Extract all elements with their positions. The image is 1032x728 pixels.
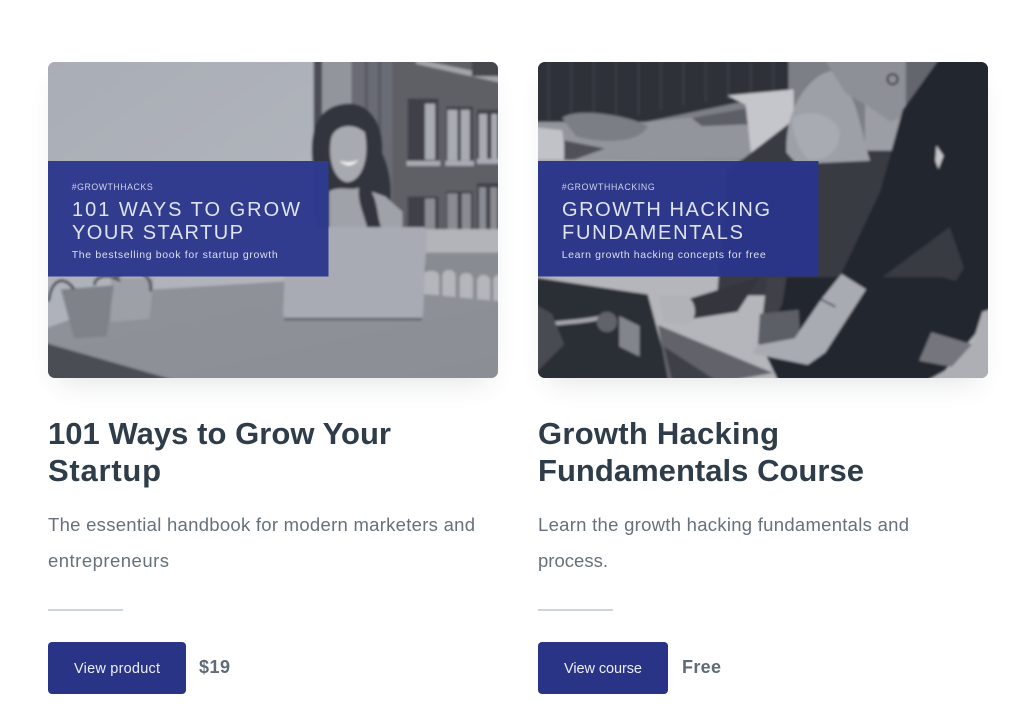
banner hashtag: #GROWTHHACKING [562,182,655,192]
panel: Growth Hacking course card [534,59,992,694]
banner hashtag: #GROWTHHACKS [72,182,153,192]
text banner [538,161,818,276]
description [538,514,909,571]
banner subtitle: Learn growth hacking concepts for free [562,249,766,261]
description: process. [538,550,608,571]
heading: Growth Hacking [538,416,779,451]
heading: Startup [48,453,161,488]
button: view course [538,642,668,694]
cuff and right floor [919,332,972,367]
product image: woman at laptop [44,59,506,382]
product image: two women at laptop [534,59,992,382]
description: Learn the growth hacking fundamentals and [538,514,909,535]
standing woman's torso [842,59,992,381]
button: view product [48,642,186,694]
button: view course: View course [564,661,642,677]
heading: Fundamentals Course [538,453,864,488]
seated woman's lower body [760,277,964,381]
description [48,514,475,571]
description: The essential handbook for modern marketers and [48,514,475,535]
banner title [563,202,769,239]
banner title [72,202,300,239]
heading: 101 Ways to Grow Your [48,416,391,451]
price: Free [682,657,721,677]
banner title: GROWTH HACKING [562,199,770,221]
laptop [534,277,671,381]
heading [538,416,864,488]
description: entrepreneurs [48,550,169,571]
banner title: FUNDAMENTALS [562,222,743,244]
heading [48,416,391,488]
text banner [48,161,328,276]
button: view product: View product [74,661,160,677]
banner title: 101 WAYS TO GROW [72,199,300,221]
banner subtitle: The bestselling book for startup growth [72,249,278,261]
price: $19 [199,657,230,677]
banner title: YOUR STARTUP [72,222,243,244]
panel: 101 Ways product card [44,59,506,694]
forearm and hand [753,274,866,365]
